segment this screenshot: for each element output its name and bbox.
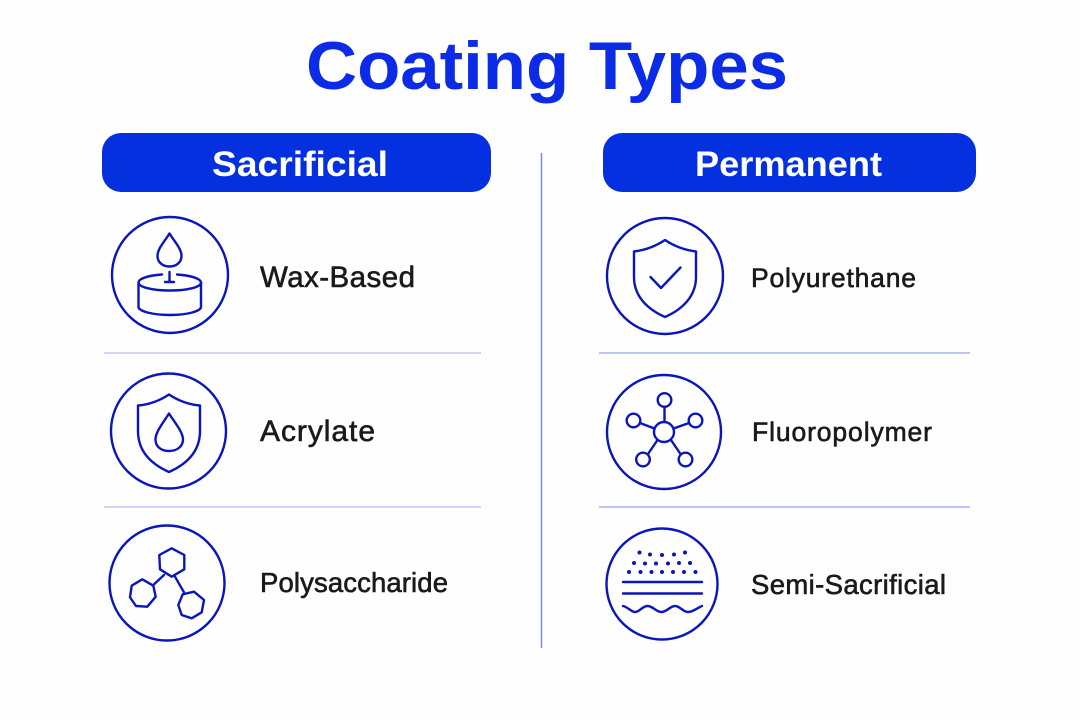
panel header: Sacrificial bbox=[102, 133, 491, 192]
label: Wax-Based: Wax-Based bbox=[260, 261, 415, 294]
icon: candle with wax drop bbox=[112, 217, 228, 333]
icon: layered surface with particles bbox=[606, 528, 718, 640]
panel header: Permanent: Permanent bbox=[695, 145, 882, 184]
title: Coating Types bbox=[306, 28, 788, 104]
icon: fluoropolymer molecule bbox=[607, 375, 721, 489]
panel header: Permanent bbox=[603, 133, 976, 192]
panel header: Sacrificial: Sacrificial bbox=[212, 145, 388, 184]
label: Semi-Sacrificial: Semi-Sacrificial bbox=[751, 569, 946, 600]
icon: shield with check bbox=[607, 218, 723, 334]
label: Fluoropolymer: Fluoropolymer bbox=[752, 417, 932, 447]
label: Acrylate: Acrylate bbox=[260, 415, 375, 448]
icon: shield with drop bbox=[111, 374, 226, 488]
label: Polyurethane: Polyurethane bbox=[751, 263, 916, 293]
icon: polysaccharide rings bbox=[110, 526, 224, 640]
label: Polysaccharide: Polysaccharide bbox=[260, 567, 448, 598]
